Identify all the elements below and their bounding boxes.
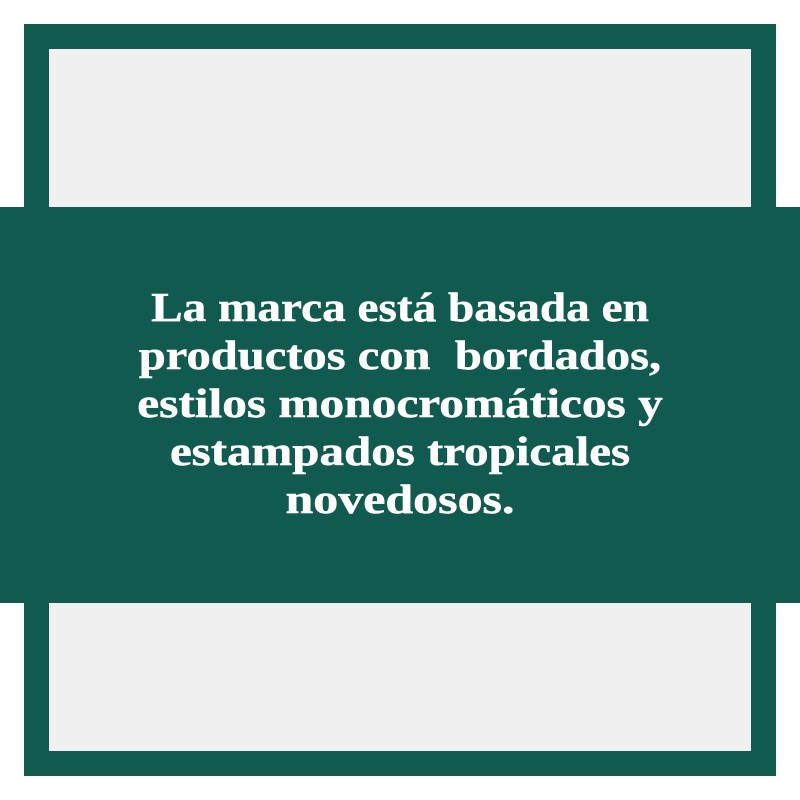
text block: brand description: estilos monocromáticos y — [137, 380, 663, 426]
text block: brand description: novedosos. — [286, 476, 514, 522]
text block: brand description: La marca está basada en — [151, 284, 649, 330]
panel: light grey interior — [49, 49, 751, 751]
band: green horizontal banner — [0, 207, 800, 603]
text block: brand description: productos con bordados, — [139, 332, 661, 378]
text block: brand description — [137, 284, 663, 522]
text block: brand description: estampados tropicales — [170, 428, 630, 474]
